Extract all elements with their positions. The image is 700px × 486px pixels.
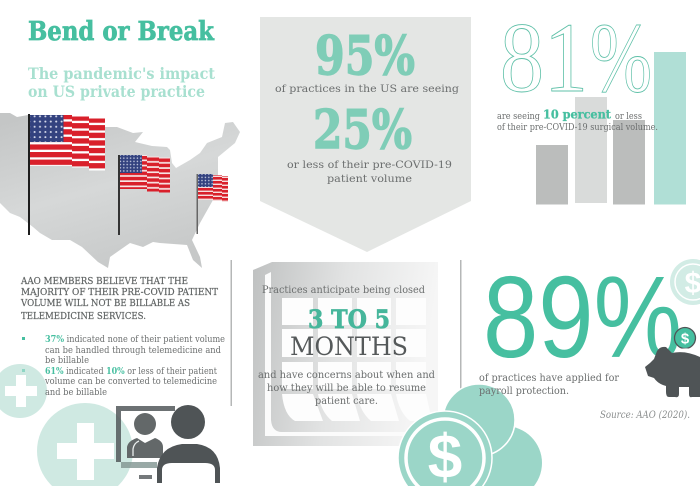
icon: large medical cross bbox=[37, 403, 133, 486]
panel: 95 percent and 25 percent bbox=[260, 17, 471, 252]
caption: 81 percent: are seeing bbox=[497, 111, 540, 122]
subtitle bbox=[28, 64, 216, 101]
stat: 81% outlined: 81 bbox=[500, 2, 588, 113]
caption: concerns: how they will be able to resume bbox=[267, 382, 426, 394]
divider left bbox=[230, 260, 232, 406]
doctor bbox=[127, 413, 163, 458]
icon: coins cluster bbox=[398, 384, 542, 486]
telemedicine heading: MAJORITY OF THEIR PRE-COVID PATIENT bbox=[21, 287, 219, 298]
stat: 81% outlined bbox=[500, 2, 652, 113]
subtitle: The pandemic's impact bbox=[28, 64, 216, 83]
icon: small medical cross bbox=[0, 364, 47, 418]
pig body bbox=[645, 347, 700, 397]
bullet list: volume can be converted to telemedicine bbox=[44, 376, 217, 387]
bullet list: and be billable bbox=[45, 387, 107, 398]
medium flag bbox=[118, 155, 170, 235]
divider right bbox=[460, 260, 462, 406]
telemedicine heading: AAO MEMBERS BELIEVE THAT THE bbox=[20, 276, 188, 287]
title: Bend or Break bbox=[28, 17, 215, 47]
map silhouette bbox=[0, 113, 240, 268]
stat: 81% outlined: % bbox=[590, 2, 652, 113]
caption: concerns bbox=[258, 369, 435, 407]
telemedicine heading bbox=[20, 276, 219, 322]
telemedicine heading: TELEMEDICINE SERVICES. bbox=[21, 311, 146, 322]
text: months closed: Practices anticipate being closed bbox=[262, 284, 425, 296]
bar chart bbox=[536, 52, 686, 204]
icon: piggy bank: $ bbox=[681, 330, 690, 348]
caption: patient volume bbox=[287, 159, 452, 185]
caption: 81 percent bbox=[497, 106, 658, 133]
caption: patient volume: patient volume bbox=[327, 173, 412, 185]
stat: 95%: 95% bbox=[315, 25, 415, 87]
stat: 3 to 5: 3 TO 5 bbox=[308, 305, 390, 334]
caption: 81 percent: or less bbox=[615, 111, 642, 122]
subtitle: on US private practice bbox=[28, 82, 205, 101]
stat: 25%: 25% bbox=[313, 99, 412, 161]
caption: concerns: patient care. bbox=[315, 395, 378, 407]
caption: payroll protection: of practices have applied for bbox=[479, 372, 620, 384]
monitor bbox=[116, 406, 175, 479]
panel background arrow bbox=[260, 17, 471, 252]
text: months closed bbox=[258, 284, 435, 407]
bullet list: be billable bbox=[45, 355, 89, 366]
icon: pale dollar coin bbox=[670, 259, 700, 305]
bullet list bbox=[22, 334, 225, 398]
icon: telemedicine visit bbox=[116, 405, 220, 483]
icon: piggy bank bbox=[645, 328, 700, 397]
bullet list: 61% indicated 10% or less of their patient bbox=[45, 366, 217, 377]
caption: patient volume: or less of their pre-COVID-19 bbox=[287, 159, 452, 171]
small flag bbox=[196, 174, 228, 234]
patient bbox=[157, 405, 220, 483]
bullet list: can be handled through telemedicine and bbox=[45, 345, 221, 356]
caption: payroll protection: payroll protection. bbox=[479, 385, 569, 397]
caption: 81 percent: 10 percent bbox=[543, 106, 611, 122]
map of the United States with flags bbox=[0, 113, 240, 268]
coin bbox=[674, 328, 696, 348]
caption: 81 percent: of their pre-COVID-19 surgical volume. bbox=[497, 122, 658, 133]
stat: months: MONTHS bbox=[290, 332, 408, 361]
bullet list: 37% indicated none of their patient volume bbox=[45, 334, 225, 345]
caption: concerns: and have concerns about when and bbox=[258, 369, 435, 381]
icon: calendar bbox=[253, 262, 438, 446]
large flag bbox=[28, 114, 105, 235]
caption: practices in the US: of practices in the US are seeing bbox=[275, 83, 459, 95]
caption: payroll protection bbox=[479, 372, 620, 397]
telemedicine heading: VOLUME WILL NOT BE BILLABLE AS bbox=[20, 298, 190, 309]
